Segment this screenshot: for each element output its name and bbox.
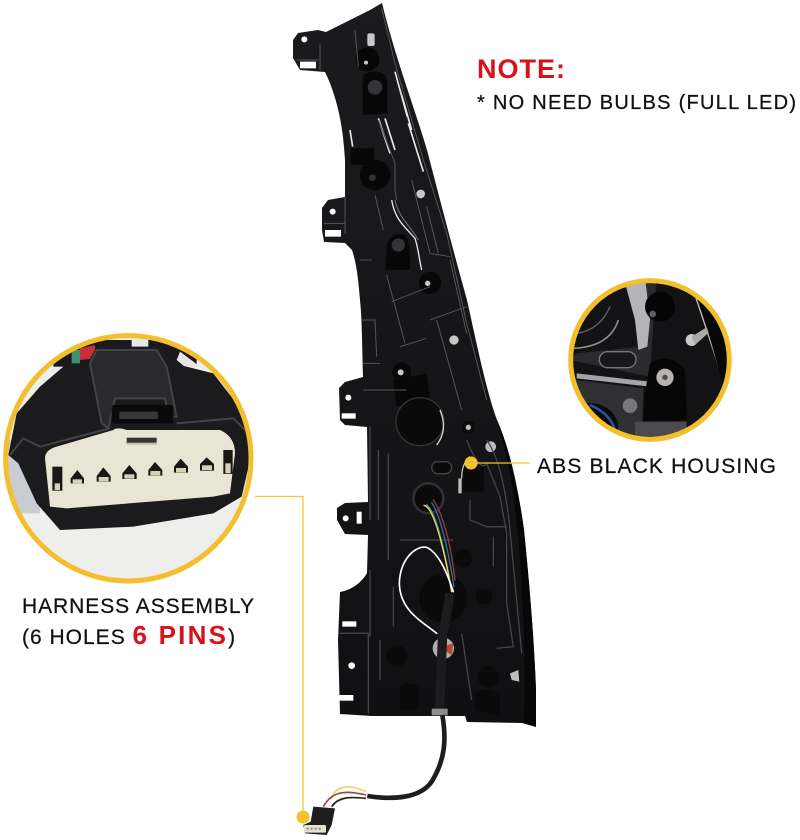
housing body <box>293 3 536 727</box>
grey grommet <box>433 638 454 659</box>
note heading: NOTE: <box>477 54 565 84</box>
label: ABS BLACK HOUSING <box>537 455 776 478</box>
connector close-up shapes <box>8 440 40 514</box>
ribs <box>339 427 522 713</box>
harness line two: (6 HOLES 6 PINS) <box>22 620 235 650</box>
callout: harness leader <box>255 496 310 824</box>
connector <box>303 807 335 835</box>
mounting holes <box>339 512 362 701</box>
shell rim <box>10 418 245 455</box>
pin slots <box>52 450 233 491</box>
black connector shell <box>8 347 249 530</box>
marker dot <box>464 456 478 470</box>
leader line <box>255 496 303 817</box>
tail light housing <box>293 3 536 835</box>
cream face <box>45 428 235 508</box>
harness line one: HARNESS ASSEMBLY <box>22 595 254 618</box>
latch <box>90 350 177 428</box>
grommets and bosses <box>386 398 500 717</box>
white wire <box>399 547 453 633</box>
bundled wires <box>399 500 455 633</box>
mounting tabs <box>300 36 356 419</box>
surface ribs <box>350 72 423 270</box>
wire sheath and cable <box>439 593 450 713</box>
housing close-up shapes <box>573 283 656 376</box>
bolts and bosses <box>351 47 441 407</box>
ring <box>571 281 729 439</box>
detail circle: connector close-up <box>0 336 251 581</box>
right edge band <box>497 420 536 727</box>
cable tie <box>432 709 448 715</box>
note text: * NO NEED BULBS (FULL LED) <box>477 92 796 114</box>
marker dot <box>296 810 310 824</box>
ring <box>6 336 251 581</box>
bolt highlights <box>458 425 519 682</box>
callout: ABS black housing <box>464 455 776 478</box>
upper details <box>297 8 487 419</box>
lower details <box>303 398 522 835</box>
lead cable <box>367 715 444 798</box>
detail circle: housing close-up <box>570 273 733 440</box>
leader line <box>471 462 530 464</box>
connector wires <box>323 787 366 807</box>
harness label <box>22 595 254 650</box>
